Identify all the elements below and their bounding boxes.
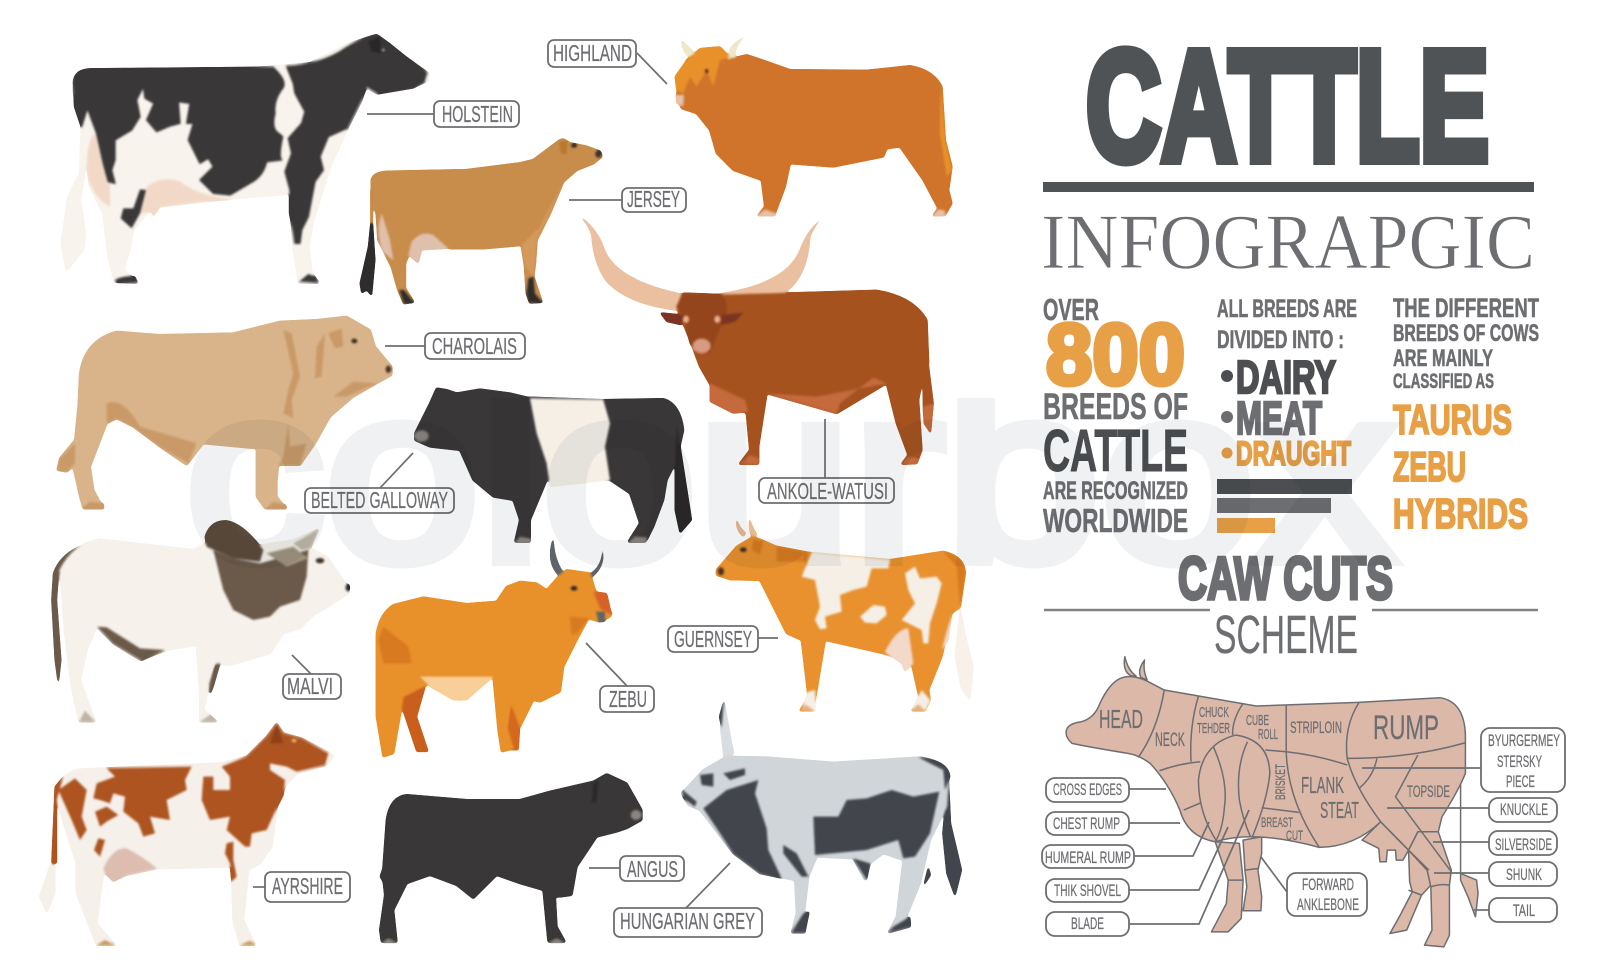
animal: Malvi cow: [52, 521, 350, 722]
diagram labels: cut names on the cow: STRIPLOIN: [1290, 718, 1342, 737]
label: Ayrshire: [253, 872, 350, 902]
animal: Highland cow: [675, 35, 952, 216]
text block: over 800 breeds: CATTLE: [1043, 418, 1188, 484]
callout: Byurgermey stersky piece: [1362, 728, 1565, 792]
text block: breeds divided into: DRAUGHT: [1236, 435, 1351, 473]
callout: Silverside: SILVERSIDE: [1495, 835, 1552, 854]
animal: Hungarian Grey: [682, 700, 962, 933]
text block: classification: TAURUS: [1393, 396, 1512, 443]
label: Angus: [589, 856, 684, 882]
callout: Tail: TAIL: [1513, 901, 1535, 920]
text block: over 800 breeds: BREEDS OF: [1043, 386, 1188, 427]
callout: Shunk: [1434, 862, 1557, 886]
text block: classification: ZEBU: [1393, 443, 1466, 490]
watermark: colourbox: [185, 334, 1395, 613]
heading: caw cuts scheme: CAW CUTS: [1178, 545, 1393, 612]
animal: Zebu: [377, 537, 612, 757]
callout: Humeral rump: [1042, 822, 1209, 868]
callout: Shunk: SHUNK: [1506, 865, 1542, 884]
diagram labels: cut names on the cow: CHUCK: [1199, 704, 1229, 721]
label: Ankole-Watusi: ANKOLE-WATUSI: [767, 478, 888, 504]
subtitle: INFOGRAPGIC: INFOGRAPGIC: [1041, 198, 1535, 285]
diagram labels: cut names on the cow: CUT: [1286, 827, 1303, 843]
callout: Byurgermey stersky piece: STERSKY: [1497, 752, 1542, 771]
text block: over 800 breeds: 800: [1046, 307, 1185, 403]
diagram labels: cut names on the cow: BRISKET: [1272, 764, 1288, 800]
text block: classification: THE DIFFERENT: [1393, 293, 1539, 323]
animal: Holstein cow: [62, 35, 428, 283]
heading: caw cuts scheme: SCHEME: [1214, 605, 1358, 665]
text block: over 800 breeds: OVER: [1043, 292, 1099, 327]
animal: Ayrshire cow: [39, 723, 333, 945]
label: Guernsey: GUERNSEY: [674, 626, 752, 652]
callout: Humeral rump: HUMERAL RUMP: [1045, 848, 1131, 867]
callout: Blade: [1046, 810, 1249, 936]
text block: breeds divided into: DIVIDED INTO :: [1217, 326, 1344, 354]
callout: Thik shovel: [1046, 827, 1228, 902]
heading: caw cuts scheme: [1044, 545, 1538, 665]
title rule: [1043, 182, 1534, 192]
label: Ayrshire: AYRSHIRE: [272, 873, 343, 899]
callout: Thik shovel: THIK SHOVEL: [1054, 881, 1121, 900]
diagram labels: cut names on the cow: TEHDER: [1197, 720, 1230, 737]
text block: classification: [1393, 293, 1539, 537]
label: Holstein: HOLSTEIN: [442, 101, 513, 127]
callout: Forward anklebone: FORWARD: [1302, 875, 1354, 894]
text block: breeds divided into: MEAT: [1236, 392, 1322, 444]
callout: Knuckle: KNUCKLE: [1500, 800, 1548, 819]
text block: over 800 breeds: [1043, 292, 1188, 539]
callout: Blade: BLADE: [1071, 914, 1104, 933]
callout: Chest rump: CHEST RUMP: [1053, 814, 1120, 833]
label: Highland: HIGHLAND: [553, 40, 632, 66]
text block: over 800 breeds: ARE RECOGNIZED: [1043, 477, 1188, 505]
diagram labels: cut names on the cow: CUBE: [1246, 712, 1269, 729]
animal: Belted Galloway cow: [415, 388, 692, 542]
diagram labels: cut names on the cow: [1099, 704, 1450, 843]
label: Zebu: [586, 643, 654, 712]
bar chart: breed type bars: [1217, 479, 1352, 533]
text block: breeds divided into: DAIRY: [1236, 351, 1336, 403]
label: Hungarian Grey: [614, 863, 762, 937]
label: Charolais: [385, 333, 525, 359]
label: Angus: ANGUS: [627, 856, 678, 882]
text block: classification: HYBRIDS: [1393, 490, 1528, 537]
label: Jersey: JERSEY: [627, 186, 680, 212]
animal: Guernsey cow: [717, 517, 973, 711]
label: Hungarian Grey: HUNGARIAN GREY: [620, 908, 755, 934]
text block: breeds divided into: [1217, 295, 1357, 473]
diagram labels: cut names on the cow: FLANK: [1301, 772, 1344, 798]
label: Malvi: [283, 655, 341, 699]
callout: Forward anklebone: ANKLEBONE: [1297, 895, 1359, 914]
callout: Knuckle: [1387, 798, 1557, 822]
diagram labels: cut names on the cow: RUMP: [1373, 709, 1439, 747]
label: Belted Galloway: BELTED GALLOWAY: [311, 487, 448, 513]
callout: Chest rump: [1046, 812, 1180, 835]
label: Highland: [548, 40, 667, 84]
label: Ankole-Watusi: [759, 419, 894, 504]
callout: Byurgermey stersky piece: PIECE: [1506, 772, 1535, 791]
label: Charolais: CHAROLAIS: [432, 333, 517, 359]
label: Malvi: MALVI: [287, 673, 333, 699]
callout: Tail: [1474, 898, 1557, 922]
diagram labels: cut names on the cow: NECK: [1155, 730, 1185, 751]
label: Belted Galloway: [305, 453, 454, 513]
label: Holstein: [367, 101, 519, 127]
animal: Ankole-Watusi cow: [575, 213, 933, 464]
callout: Cross edges: [1046, 778, 1166, 802]
text block: classification: CLASSIFIED AS: [1393, 370, 1494, 393]
animal: Angus: [380, 774, 642, 943]
diagram labels: cut names on the cow: TOPSIDE: [1407, 782, 1450, 801]
animal: Charolais bull: [57, 317, 392, 509]
label: Jersey: [569, 186, 686, 212]
diagram labels: cut names on the cow: BREAST: [1261, 814, 1293, 830]
text block: over 800 breeds: WORLDWIDE: [1043, 502, 1188, 539]
callout: Forward anklebone: [1261, 857, 1367, 916]
callout: Cross edges: CROSS EDGES: [1053, 780, 1122, 799]
diagram labels: cut names on the cow: STEAT: [1320, 797, 1359, 823]
label: Zebu: ZEBU: [609, 686, 647, 712]
text block: breeds divided into: ALL BREEDS ARE: [1217, 295, 1357, 323]
text block: classification: ARE MAINLY: [1393, 345, 1493, 372]
diagram: cow cuts scheme: [1066, 657, 1478, 947]
diagram labels: cut names on the cow: ROLL: [1258, 726, 1278, 743]
animal: Jersey cow: [360, 139, 602, 303]
diagram labels: cut names on the cow: HEAD: [1099, 704, 1143, 734]
callout: Silverside: [1433, 831, 1557, 855]
